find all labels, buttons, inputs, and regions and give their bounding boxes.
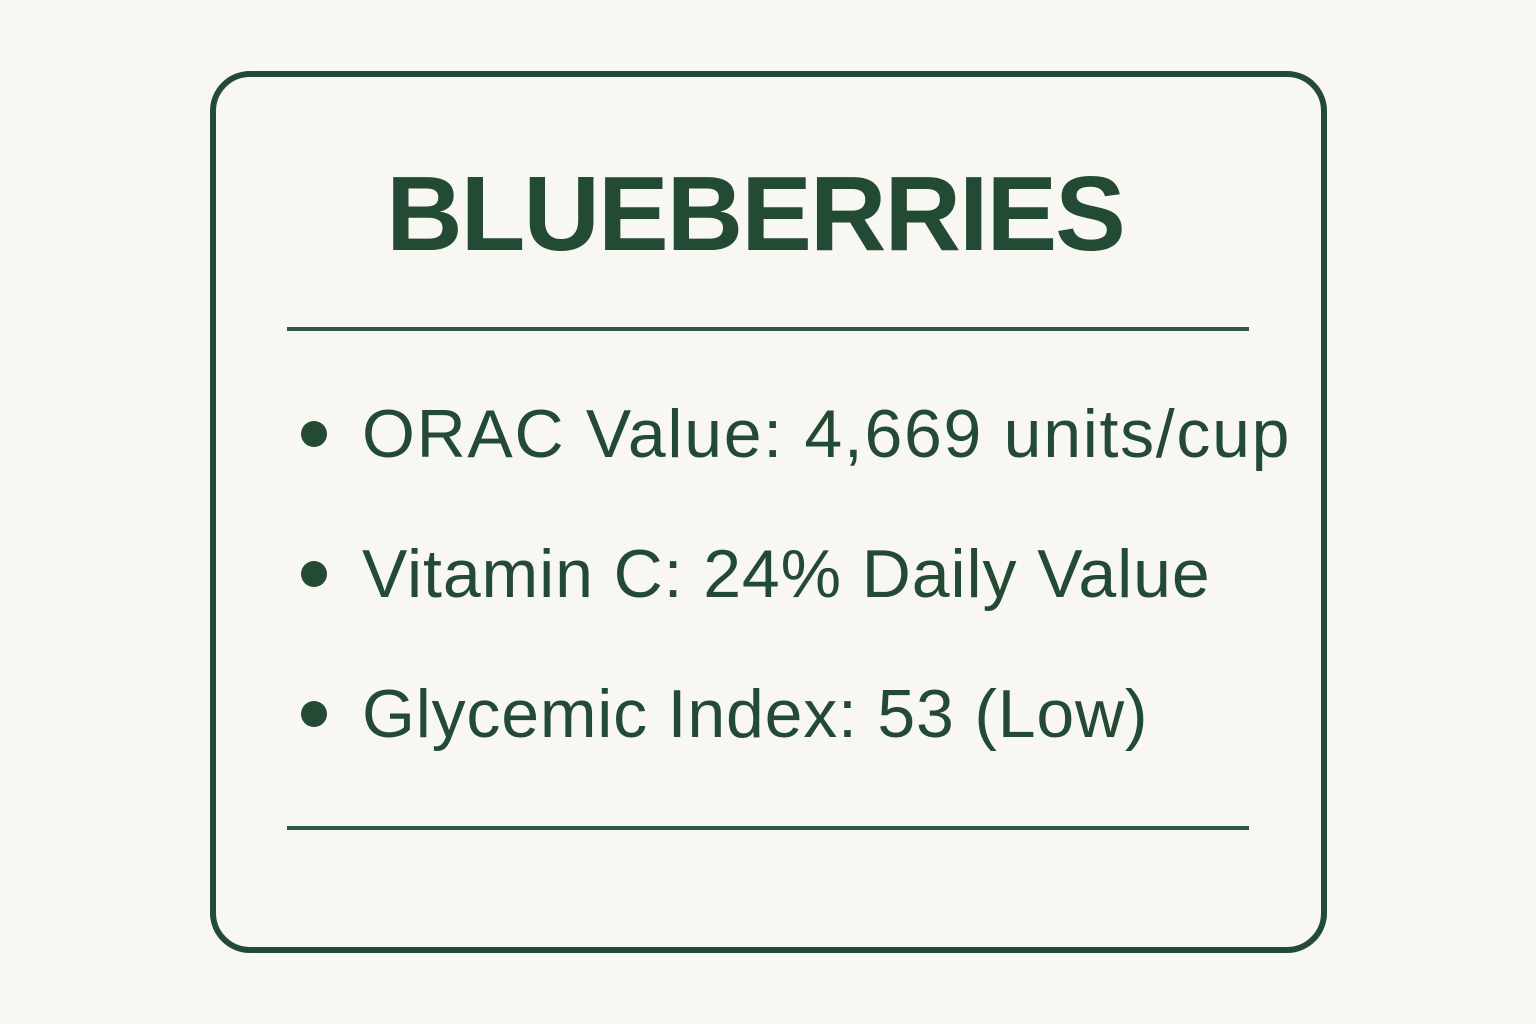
panel: blueberries card <box>210 71 1327 953</box>
icon: bullet dot <box>301 561 327 587</box>
bullet: vitamin C <box>301 536 1211 612</box>
icon: bullet dot <box>301 421 327 447</box>
bullet: ORAC value <box>301 396 1291 472</box>
text: vitamin C: Vitamin C: 24% Daily Value <box>362 536 1211 612</box>
text: ORAC value: ORAC Value: 4,669 units/cup <box>362 396 1291 472</box>
text: glycemic index: Glycemic Index: 53 (Low) <box>362 676 1148 752</box>
icon: bullet dot <box>301 701 327 727</box>
bullet: glycemic index <box>301 676 1148 752</box>
title: BLUEBERRIES <box>386 155 1124 273</box>
